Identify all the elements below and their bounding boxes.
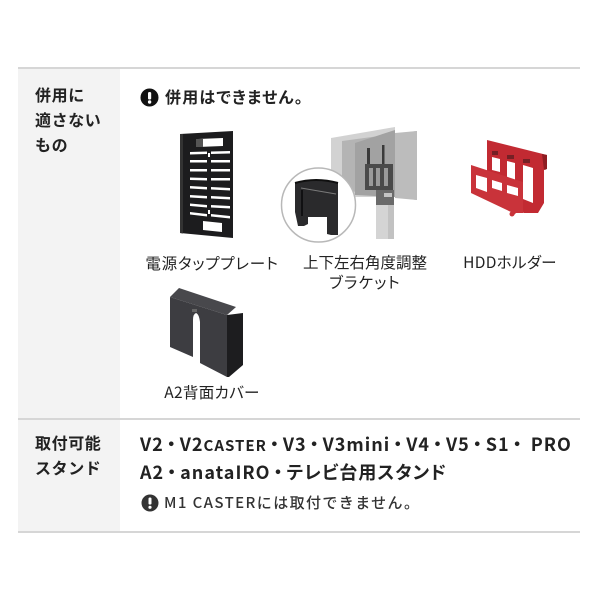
stand list line 2: A2・anataIRO・テレビ台用スタンド xyxy=(140,459,447,485)
heading: compatible stands xyxy=(35,430,101,479)
label column: unsuitable items xyxy=(18,69,120,419)
heading: unsuitable items xyxy=(35,82,101,156)
heading: compatible stands: 取付可能 xyxy=(35,430,101,454)
warning icon small xyxy=(142,494,158,512)
middle table border xyxy=(18,418,580,420)
caption: tilt bracket xyxy=(303,251,427,292)
bracket detail circle xyxy=(282,168,356,242)
top table border xyxy=(18,67,580,69)
heading: unsuitable items: もの xyxy=(35,132,68,156)
heading: unsuitable items: 併用に xyxy=(35,82,85,106)
caption: A2 back cover: A2背面カバー xyxy=(164,381,260,403)
caption: HDD holder: HDDホルダー xyxy=(463,251,557,273)
caption: tilt bracket: 上下左右角度調整 xyxy=(303,251,427,273)
caution text: M1 CASTERには取付できません。 xyxy=(164,492,420,513)
heading: compatible stands: スタンド xyxy=(35,455,101,479)
bottom table border xyxy=(18,531,580,533)
warning icon xyxy=(140,88,158,106)
label column: compatible stands xyxy=(18,420,120,531)
heading: unsuitable items: 適さない xyxy=(35,107,101,131)
caption: power strip plate: 電源タッププレート xyxy=(145,252,279,274)
caption: tilt bracket: ブラケット xyxy=(329,270,401,292)
notice text: 併用はできません。 xyxy=(165,84,304,108)
stand list line 1: V2・V2CASTER・V3・V3mini・V4・V5・S1・ PRO xyxy=(140,431,572,457)
